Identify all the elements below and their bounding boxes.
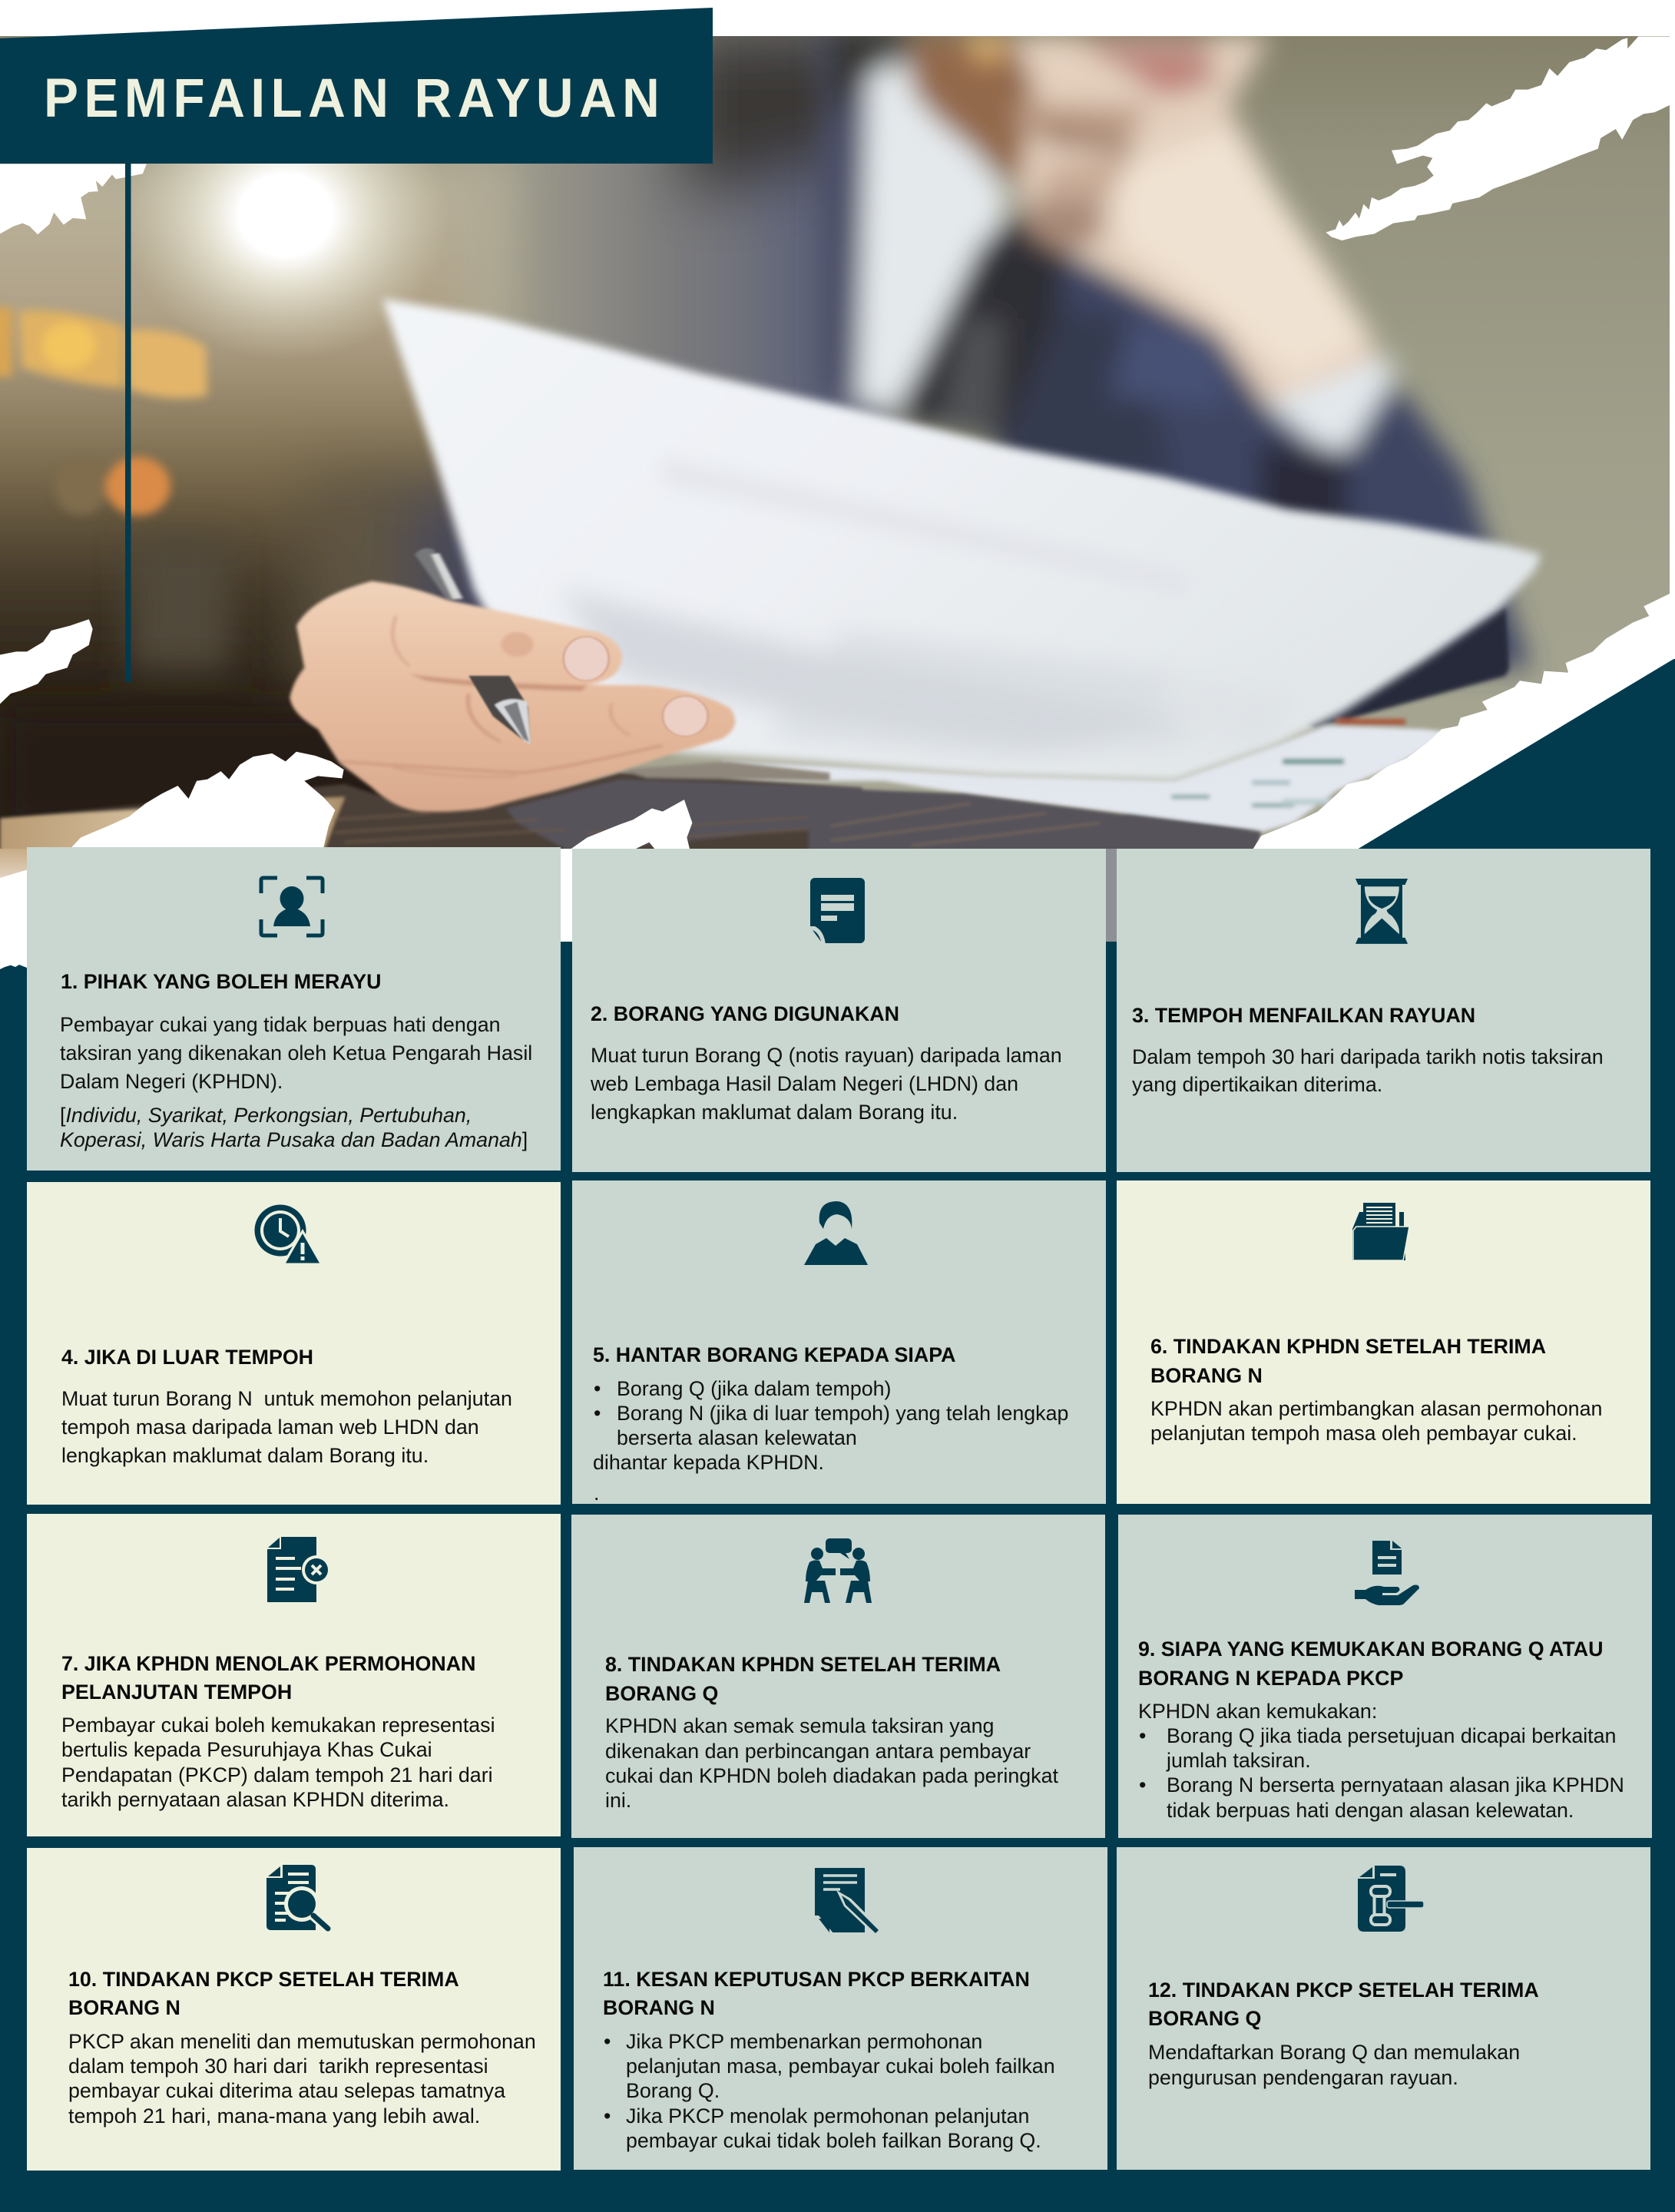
panel 12: tindakan PKCP setelah terima borang Q <box>1117 1847 1650 2170</box>
bokeh lights <box>0 307 207 515</box>
heading: 2. BORANG YANG DIGUNAKAN <box>591 1002 899 1025</box>
body text: web Lembaga Hasil Dalam Negeri (LHDN) dan <box>590 1072 1018 1095</box>
bullet list: pelanjutan masa, pembayar cukai boleh failkan <box>626 2055 1055 2078</box>
body text: Muat turun Borang N untuk memohon pelanjutan <box>61 1387 512 1410</box>
bullet list: berserta alasan kelewatan <box>617 1426 857 1449</box>
body text: Pembayar cukai yang tidak berpuas hati dengan <box>60 1013 501 1036</box>
heading <box>1150 1335 1546 1387</box>
icon: clock with warning <box>255 1204 324 1266</box>
photo: businessman reading a document <box>0 15 1670 883</box>
bullet list: Borang Q (jika dalam tempoh) <box>617 1377 891 1400</box>
body text: taksiran yang dikenakan oleh Ketua Pengarah Hasil <box>60 1041 532 1065</box>
icon: person in focus frame <box>261 878 323 935</box>
body text: lengkapkan maklumat dalam Borang itu. <box>61 1444 429 1467</box>
bullet list: • <box>604 2104 611 2128</box>
body text: Muat turun Borang Q (notis rayuan) daripada laman <box>591 1044 1062 1067</box>
body text: tempoh masa daripada laman web LHDN dan <box>61 1416 479 1439</box>
bullet list <box>1138 1700 1624 1822</box>
heading: 4. JIKA DI LUAR TEMPOH <box>61 1346 313 1369</box>
panel 2: borang yang digunakan <box>572 849 1106 1172</box>
body text: ini. <box>605 1789 631 1812</box>
heading <box>61 1652 475 1704</box>
body text: Mendaftarkan Borang Q dan memulakan <box>1148 2041 1520 2064</box>
body text: yang dipertikaikan diterima. <box>1132 1073 1382 1096</box>
body text: PKCP akan meneliti dan memutuskan permohonan <box>68 2030 536 2053</box>
body text: tarikh pernyataan alasan KPHDN diterima. <box>61 1788 449 1811</box>
panel 10: tindakan PKCP setelah terima borang N <box>27 1848 561 2171</box>
body text: KPHDN akan pertimbangkan alasan permohonan <box>1150 1397 1602 1420</box>
body text <box>1132 1045 1604 1096</box>
body text <box>1150 1397 1602 1445</box>
heading: 7. JIKA KPHDN MENOLAK PERMOHONAN <box>61 1652 475 1675</box>
body text <box>605 1714 1058 1812</box>
paper stack <box>382 299 1541 834</box>
bullet list: • <box>1139 1724 1146 1747</box>
bullet list: jumlah taksiran. <box>1166 1749 1311 1772</box>
body text: Pendapatan (PKCP) dalam tempoh 21 hari dari <box>61 1763 493 1786</box>
body text: dalam tempoh 30 hari dari tarikh representasi <box>68 2055 488 2078</box>
icon: document with magnifier <box>266 1865 328 1930</box>
body text: pelanjutan tempoh masa oleh pembayar cukai. <box>1150 1422 1577 1445</box>
heading <box>603 1968 1030 2019</box>
heading <box>1138 1637 1603 1690</box>
icon: two people discussing <box>804 1538 872 1603</box>
bullet list: Jika PKCP membenarkan permohonan <box>626 2030 982 2053</box>
heading: 1. PIHAK YANG BOLEH MERAYU <box>61 970 381 993</box>
body text: dikenakan dan perbincangan antara pembayar <box>605 1740 1031 1763</box>
bullet list: Borang N (jika di luar tempoh) yang telah lengkap <box>617 1402 1068 1425</box>
body text: KPHDN akan semak semula taksiran yang <box>605 1714 994 1737</box>
body text: tempoh 21 hari, mana-mana yang lebih awal. <box>68 2104 480 2128</box>
body text: Koperasi, Waris Harta Pusaka dan Badan Amanah] <box>60 1128 528 1151</box>
heading: BORANG Q <box>1148 2007 1261 2030</box>
heading: 11. KESAN KEPUTUSAN PKCP BERKAITAN <box>603 1968 1030 1991</box>
icon: document with pencil <box>813 1868 882 1936</box>
title banner <box>0 8 713 164</box>
panel 7: jika KPHDN menolak <box>27 1514 561 1836</box>
body text <box>60 1013 532 1151</box>
icon: document <box>808 878 865 945</box>
heading: 3. TEMPOH MENFAILKAN RAYUAN <box>1132 1004 1475 1027</box>
title text: PEMFAILAN RAYUAN <box>44 67 660 128</box>
heading: 6. TINDAKAN KPHDN SETELAH TERIMA <box>1150 1335 1546 1358</box>
heading: 12. TINDAKAN PKCP SETELAH TERIMA <box>1148 1979 1539 2002</box>
bullet list: Borang Q jika tiada persetujuan dicapai berkaitan <box>1167 1724 1616 1747</box>
body text: pengurusan pendengaran rayuan. <box>1148 2066 1458 2089</box>
icon: hourglass <box>1356 879 1408 944</box>
heading <box>68 1968 459 2019</box>
body text <box>590 1044 1062 1124</box>
panel 8: tindakan KPHDN setelah terima borang Q <box>571 1515 1105 1838</box>
icon: hand holding document <box>1355 1541 1419 1605</box>
heading: 10. TINDAKAN PKCP SETELAH TERIMA <box>68 1968 459 1991</box>
bullet list: • <box>604 2030 611 2053</box>
bullet list: KPHDN akan kemukakan: <box>1138 1700 1377 1723</box>
bullet list: Borang Q. <box>626 2079 720 2102</box>
body text: pembayar cukai diterima atau selepas tamatnya <box>68 2079 505 2102</box>
icon: document with gavel <box>1358 1866 1424 1932</box>
vertical accent line <box>125 164 131 682</box>
panel 4: jika di luar tempoh <box>27 1182 561 1505</box>
bullet list: • <box>1139 1773 1146 1796</box>
bullet list: . <box>594 1482 599 1505</box>
heading: BORANG N <box>68 1996 180 2019</box>
body text <box>68 2030 536 2128</box>
body text: Pembayar cukai boleh kemukakan representasi <box>61 1714 495 1737</box>
body text: lengkapkan maklumat dalam Borang itu. <box>591 1101 958 1124</box>
man: shirt, tie, hand, sleeve <box>819 36 1531 668</box>
body text: Dalam Negeri (KPHDN). <box>60 1070 283 1093</box>
icon: document rejected <box>267 1537 331 1602</box>
heading: BORANG Q <box>605 1682 718 1705</box>
bullet list: • <box>594 1377 601 1400</box>
body text: cukai dan KPHDN boleh diadakan pada peringkat <box>605 1764 1058 1787</box>
heading <box>1148 1979 1539 2030</box>
heading: BORANG N KEPADA PKCP <box>1138 1667 1403 1690</box>
icon: folder with papers <box>1352 1203 1409 1260</box>
heading <box>605 1653 1001 1705</box>
sun glare <box>140 164 432 349</box>
icon: person silhouette <box>804 1201 868 1265</box>
panel 3: tempoh menfailkan rayuan <box>1117 849 1650 1172</box>
photo edge: gap fragments <box>0 849 1117 942</box>
bullet list: dihantar kepada KPHDN. <box>593 1451 824 1474</box>
dark background panel <box>0 658 1675 2212</box>
white brush strokes over photo <box>0 0 1675 969</box>
heading: BORANG N <box>603 1996 715 2019</box>
heading: 8. TINDAKAN KPHDN SETELAH TERIMA <box>605 1653 1001 1676</box>
heading: PELANJUTAN TEMPOH <box>61 1681 292 1704</box>
bullet list <box>604 2030 1055 2152</box>
panel 5: hantar borang kepada siapa <box>572 1181 1106 1505</box>
bullet list <box>593 1377 1068 1505</box>
panel 11: kesan keputusan PKCP <box>574 1847 1107 2170</box>
heading: BORANG N <box>1150 1364 1263 1387</box>
bullet list: Jika PKCP menolak permohonan pelanjutan <box>626 2104 1029 2128</box>
body text <box>61 1387 512 1467</box>
panel 9: siapa yang kemukakan borang <box>1118 1515 1652 1838</box>
bullet list: pembayar cukai tidak boleh failkan Borang Q. <box>626 2129 1041 2152</box>
bullet list: Borang N berserta pernyataan alasan jika KPHDN <box>1167 1773 1624 1796</box>
bullet list: tidak berpuas hati dengan alasan kelewatan. <box>1167 1799 1574 1822</box>
hand with pen <box>415 548 463 600</box>
heading: 5. HANTAR BORANG KEPADA SIAPA <box>593 1343 955 1366</box>
heading: 9. SIAPA YANG KEMUKAKAN BORANG Q ATAU <box>1138 1637 1603 1661</box>
bullet list: • <box>594 1402 601 1425</box>
body text <box>1148 2041 1520 2089</box>
panel 6: tindakan KPHDN setelah terima borang N <box>1117 1181 1650 1504</box>
body text <box>61 1714 495 1811</box>
panel 1: pihak yang boleh merayu <box>27 847 561 1171</box>
body text: bertulis kepada Pesuruhjaya Khas Cukai <box>61 1738 432 1761</box>
body text: Dalam tempoh 30 hari daripada tarikh notis taksiran <box>1132 1045 1604 1068</box>
body text: [Individu, Syarikat, Perkongsian, Pertubuhan, <box>60 1104 472 1127</box>
table <box>0 761 1261 852</box>
